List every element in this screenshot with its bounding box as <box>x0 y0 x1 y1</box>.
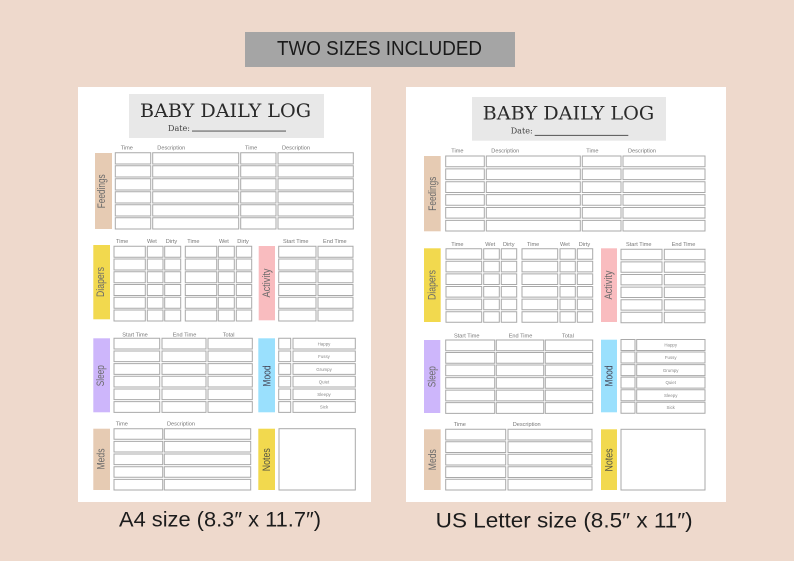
section: Letter sleep: Start Time <box>454 334 480 340</box>
section: Letter feedings: Time <box>451 149 464 155</box>
heading: Letter title block: BABY DAILY LOG <box>483 103 654 124</box>
section: A4 mood: Mood <box>262 366 274 386</box>
section: A4 meds: Time <box>116 421 128 427</box>
section: A4 feedings: Description <box>157 145 185 151</box>
banner: two sizes included <box>245 32 515 67</box>
section: A4 diapers: Time <box>187 239 200 245</box>
section: Letter diapers: Dirty <box>579 242 590 248</box>
heading: Letter title block: Date: <box>511 126 533 136</box>
section: Letter feedings: Description <box>628 149 656 155</box>
section: A4 notes: Notes <box>261 448 273 471</box>
section: Letter feedings: Time <box>586 149 599 155</box>
heading: Letter title block <box>472 97 666 141</box>
section: A4 mood: Sick <box>320 404 329 410</box>
section: A4 mood: Happy <box>318 342 331 346</box>
section: A4 diapers: Wet <box>219 239 229 245</box>
section: A4 diapers <box>93 239 252 321</box>
section: A4 diapers: Diapers <box>95 267 107 297</box>
section: Letter meds: Time <box>454 422 466 428</box>
section: A4 sleep: End Time <box>173 332 196 338</box>
section: A4 activity: End Time <box>323 239 347 245</box>
heading: A4 title block: Date: <box>168 123 190 133</box>
section: A4 sleep <box>93 332 252 412</box>
section: A4 diapers: Time <box>116 239 128 245</box>
section: Letter activity: End Time <box>672 242 695 248</box>
section: A4 mood: Quiet <box>319 379 330 384</box>
section: Letter feedings: Description <box>491 149 519 155</box>
section: Letter notes <box>601 429 705 490</box>
section: A4 diapers: Dirty <box>237 239 249 245</box>
section: Letter diapers: Time <box>527 242 539 248</box>
section: A4 sleep: Total <box>223 332 235 338</box>
section: A4 sleep: Start Time <box>122 332 148 338</box>
section: A4 diapers: Wet <box>147 239 157 245</box>
heading: A4 title block: BABY DAILY LOG <box>140 101 311 122</box>
section: Letter diapers <box>424 242 593 322</box>
caption: US Letter size: US Letter size (8.5″ x 11″) <box>436 509 693 532</box>
section: Letter mood: Fussy <box>665 355 677 360</box>
section: A4 meds <box>93 421 251 490</box>
section: Letter mood: Sleepy <box>664 393 678 398</box>
section: A4 notes <box>258 429 355 490</box>
section: A4 feedings: Time <box>121 145 133 151</box>
section: Letter mood: Grumpy <box>663 368 679 373</box>
section: Letter mood: Mood <box>604 366 616 386</box>
panel: A4 log page <box>78 87 371 502</box>
section: A4 feedings: Description <box>282 145 310 151</box>
section: A4 feedings <box>95 145 353 229</box>
section: A4 mood: Grumpy <box>316 367 333 372</box>
section: A4 mood: Sleepy <box>317 392 332 397</box>
section: Letter mood: Sick <box>667 405 676 410</box>
section: Letter activity <box>601 242 705 323</box>
section: Letter mood: Quiet <box>665 380 677 385</box>
section: A4 activity: Activity <box>261 268 273 298</box>
section: Letter sleep: End Time <box>509 334 532 340</box>
section: Letter mood <box>601 340 705 413</box>
section: A4 feedings: Time <box>245 145 257 151</box>
section: Letter sleep <box>424 334 593 413</box>
section: Letter diapers: Wet <box>485 242 496 248</box>
section: Letter meds: Meds <box>427 449 439 470</box>
section: A4 diapers: Dirty <box>166 239 177 245</box>
section: A4 mood <box>258 338 355 412</box>
section: Letter diapers: Wet <box>560 242 570 248</box>
section: Letter diapers: Time <box>451 242 464 248</box>
section: Letter feedings <box>424 149 705 231</box>
section: A4 mood: Fussy <box>318 354 331 359</box>
section: Letter mood: Happy <box>664 342 678 348</box>
section: Letter meds <box>424 422 592 490</box>
heading: A4 title block <box>129 94 324 138</box>
section: Letter activity: Start Time <box>626 242 652 248</box>
section: Letter sleep: Total <box>562 334 574 340</box>
section: Letter feedings: Feedings <box>427 176 439 211</box>
caption: A4 size: A4 size (8.3″ x 11.7″) <box>119 509 321 532</box>
section: Letter diapers: Dirty <box>503 242 515 248</box>
section: A4 feedings: Feedings <box>96 174 108 208</box>
panel: US Letter log page <box>406 87 726 502</box>
section: Letter sleep: Sleep <box>426 366 438 387</box>
section: A4 meds: Meds <box>96 448 108 470</box>
section: Letter diapers: Diapers <box>426 270 438 300</box>
section: A4 activity <box>259 239 353 321</box>
section: Letter notes: Notes <box>604 448 616 472</box>
section: Letter activity: Activity <box>603 270 615 300</box>
section: A4 activity: Start Time <box>283 239 308 245</box>
section: A4 sleep: Sleep <box>95 365 107 386</box>
section: Letter meds: Description <box>513 422 541 428</box>
section: A4 meds: Description <box>167 421 195 427</box>
banner: two sizes included: TWO SIZES INCLUDED <box>277 38 482 60</box>
